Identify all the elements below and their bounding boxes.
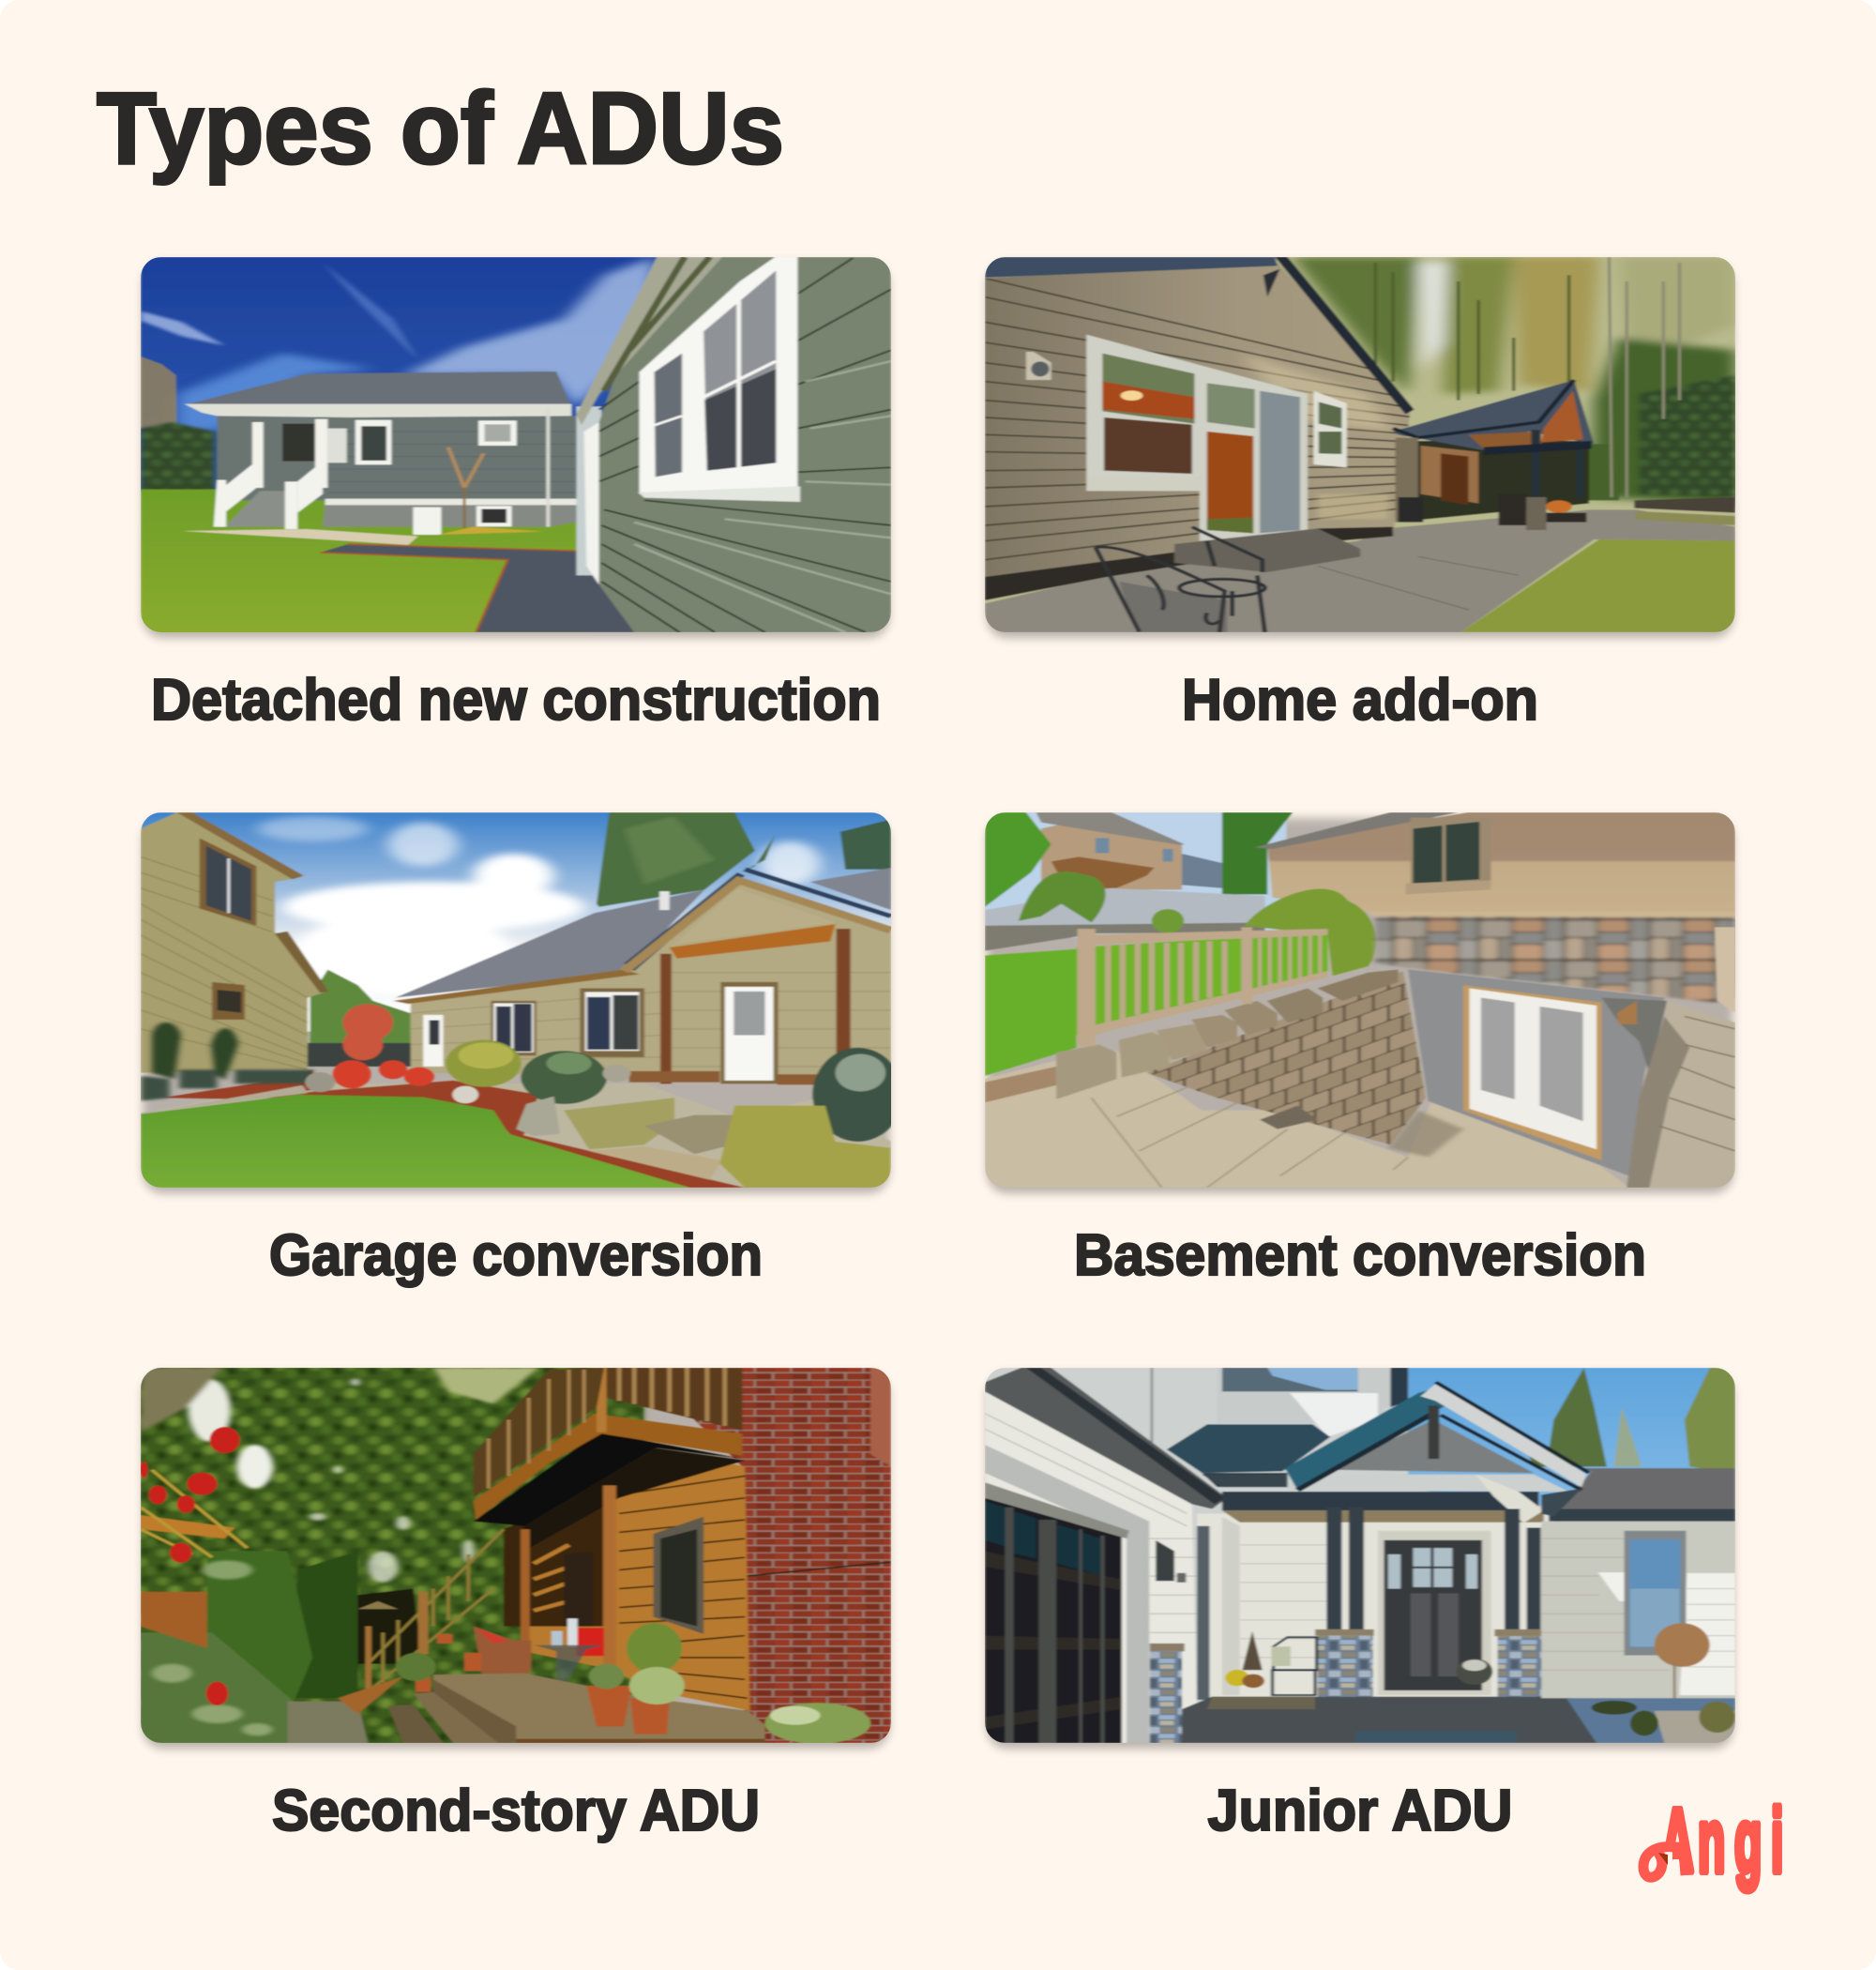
panel: junior ADU <box>985 1368 1735 1843</box>
photo: detached new construction <box>141 257 891 633</box>
caption: basement conversion: Basement conversion <box>1074 1223 1646 1288</box>
caption: detached new construction: Detached new construction <box>151 668 881 733</box>
panel: garage conversion <box>141 812 903 1288</box>
caption: garage conversion: Garage conversion <box>269 1223 763 1288</box>
photo: junior ADU <box>985 1368 1735 1743</box>
photo: home add-on <box>985 257 1770 632</box>
caption: junior ADU: Junior ADU <box>1208 1779 1512 1843</box>
panel: basement conversion <box>985 812 1735 1288</box>
caption: home add-on: Home add-on <box>1182 668 1538 733</box>
caption: second-story ADU: Second-story ADU <box>272 1779 760 1843</box>
photo: second-story ADU <box>140 1368 891 1744</box>
panel: home add-on <box>985 257 1770 733</box>
photo: garage conversion <box>141 812 903 1188</box>
title: Types of ADUs <box>97 71 784 186</box>
panel: second-story ADU <box>140 1368 891 1843</box>
panel: detached new construction <box>141 257 891 733</box>
photo: basement conversion <box>985 812 1735 1188</box>
logo: Angi: Angi <box>1661 1791 1783 1892</box>
